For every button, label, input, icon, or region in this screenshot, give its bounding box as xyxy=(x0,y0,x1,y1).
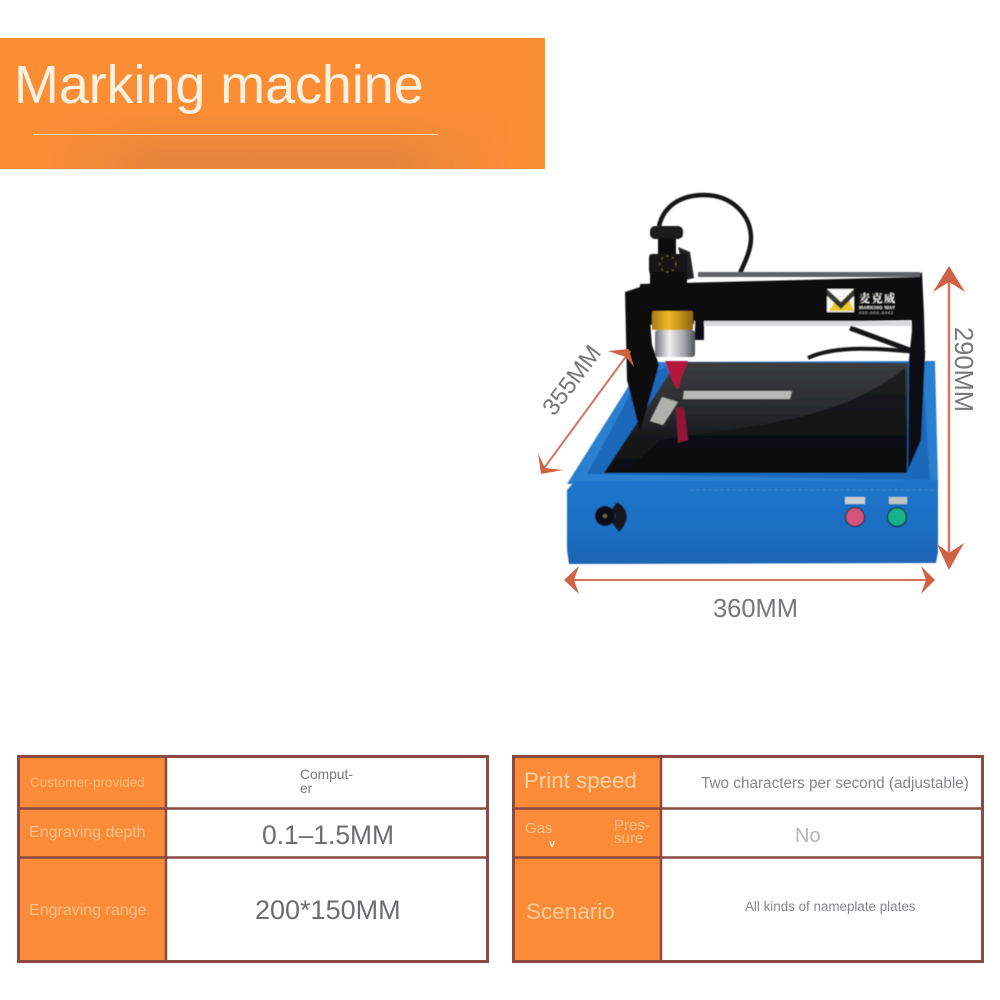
right specification table xyxy=(514,756,982,962)
row: scenario xyxy=(526,899,916,924)
rotary connector xyxy=(595,502,627,532)
row: print speed: Two characters per second (adjustable) xyxy=(701,775,969,792)
brand logo: MARKING WAY xyxy=(859,305,895,310)
row: engraving depth xyxy=(29,820,394,850)
needle reflection xyxy=(676,408,688,443)
green start button xyxy=(888,508,906,526)
row: gas pressure: sure xyxy=(614,830,643,847)
title: Marking machine xyxy=(14,55,424,115)
row: gas pressure xyxy=(525,817,821,850)
rear cable xyxy=(808,349,925,358)
title banner xyxy=(0,38,545,169)
product illustration: marking machine xyxy=(567,195,938,564)
dimension arrow: width 360MM xyxy=(564,566,935,623)
machine base top xyxy=(567,361,938,484)
dimension label: 290MM xyxy=(949,327,977,412)
indicator labels xyxy=(845,497,865,504)
brand logo xyxy=(827,289,895,315)
dimension arrow: depth 355MM xyxy=(537,340,634,474)
row: engraving depth: Engraving depth xyxy=(29,824,146,841)
row: customer-provided xyxy=(30,767,353,796)
gantry arm xyxy=(640,277,922,325)
label column xyxy=(20,758,166,960)
right gantry post xyxy=(908,272,925,470)
row: gas pressure: v xyxy=(549,838,556,850)
row: customer-provided: er xyxy=(300,781,313,796)
marking head xyxy=(649,226,704,388)
dimension label: 355MM xyxy=(537,340,607,421)
left specification table xyxy=(18,756,488,962)
row: engraving range: Engraving range xyxy=(29,902,147,919)
row: engraving depth: 0.1–1.5MM xyxy=(262,820,394,850)
dimension label: 360MM xyxy=(713,595,798,623)
row: engraving range xyxy=(29,895,401,925)
brand logo: 400-000-8442 xyxy=(859,311,893,315)
work plate xyxy=(604,362,908,473)
plate reflection xyxy=(625,368,907,473)
machine base front xyxy=(567,480,938,564)
row: customer-provided: Comput- xyxy=(300,767,353,782)
row: print speed: Print speed xyxy=(524,768,637,793)
dimension arrow: height 290MM xyxy=(933,266,977,570)
cable behind the head xyxy=(659,195,751,273)
guide rod xyxy=(694,321,911,326)
row: customer-provided: Customer-provided xyxy=(30,775,145,790)
label column xyxy=(515,758,661,960)
nameplate samples xyxy=(683,391,792,399)
row: gas pressure: Gas xyxy=(525,820,553,837)
row: engraving range: 200*150MM xyxy=(255,895,401,925)
row: scenario: All kinds of nameplate plates xyxy=(745,899,916,914)
left gantry post xyxy=(625,287,659,432)
row: gas pressure: No xyxy=(795,825,821,847)
row: scenario: Scenario xyxy=(526,899,615,924)
row: gas pressure: Pres- xyxy=(614,817,650,834)
brand name: 麦克威 xyxy=(859,290,895,306)
row: print speed xyxy=(524,768,969,793)
red stop button xyxy=(846,508,864,526)
